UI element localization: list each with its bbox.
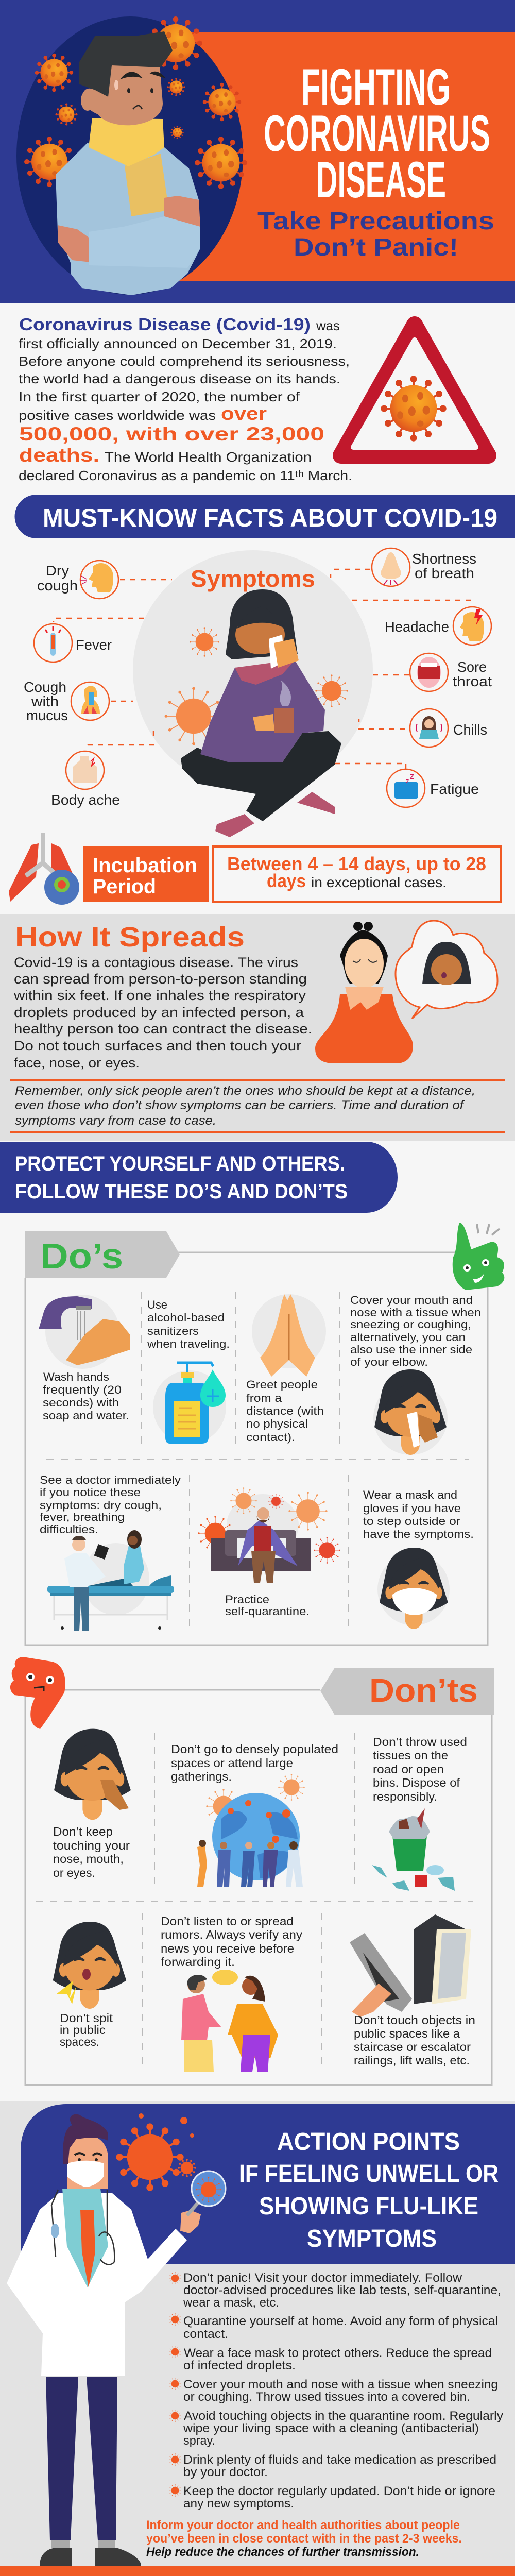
do: wash hands: seconds) with bbox=[43, 1396, 119, 1409]
hero orange band bbox=[154, 32, 515, 281]
section: hero, intro and symptoms bbox=[0, 0, 515, 905]
intro text: In the first quarter of 2020, the number of bbox=[19, 389, 300, 404]
intro text: 500,000, with over 23,000 bbox=[19, 423, 324, 445]
do: see a doctor: symptoms: dry cough, bbox=[40, 1499, 162, 1512]
panel: action points bbox=[0, 2101, 515, 2566]
hero sick man bbox=[56, 31, 200, 295]
symptom: shortness of breath: Shortness bbox=[412, 551, 476, 567]
how it spreads body: can spread from person-to-person standing bbox=[14, 971, 307, 987]
do: self-quarantine bbox=[198, 1487, 340, 1618]
symptom: cough with mucus bbox=[24, 679, 109, 723]
action list text: wipe your living space with a cleaning (antibacterial) bbox=[183, 2421, 479, 2435]
don't: spit: Don’t spit bbox=[60, 2011, 113, 2025]
hero dark oval bbox=[16, 16, 243, 295]
don't: spread rumors: Don’t listen to or spread bbox=[161, 1914, 294, 1928]
do: cover your mouth bbox=[350, 1294, 481, 1455]
symptom: dry cough bbox=[37, 561, 118, 599]
symptom: cough with mucus: with bbox=[31, 693, 59, 709]
hero panel bbox=[0, 0, 515, 303]
how it spreads body: Do not touch surfaces and then touch your bbox=[14, 1038, 301, 1054]
do: see a doctor: fever, breathing bbox=[40, 1511, 125, 1523]
action list text: Wear a face mask to protect others. Reduce the spread bbox=[184, 2346, 492, 2360]
symptom: fever: Fever bbox=[76, 637, 112, 653]
don't: touch face: touching your bbox=[53, 1839, 130, 1852]
panel: don'ts bbox=[10, 1657, 494, 2085]
don'ts tag: Don’ts bbox=[369, 1672, 478, 1709]
don't: spit bbox=[53, 1922, 126, 2048]
do: wear a mask: gloves if you have bbox=[363, 1502, 461, 1515]
action list text: doctor-advised procedures like lab tests, self-quarantine, bbox=[183, 2283, 501, 2297]
don't: touch objects: staircase or escalator bbox=[354, 2040, 471, 2054]
do: self-quarantine: Practice bbox=[225, 1593, 269, 1606]
don'ts frame bbox=[25, 1690, 492, 2085]
do: greet from a distance bbox=[246, 1294, 326, 1444]
don't: throw tissues: road or open bbox=[373, 1762, 444, 1776]
section: do's bbox=[25, 1223, 505, 1646]
section: how it spreads bbox=[0, 914, 515, 1213]
intro text: Coronavirus Disease (Covid-19) bbox=[19, 315, 311, 334]
symptom: chills bbox=[410, 709, 487, 747]
action points blue header: SYMPTOMS bbox=[307, 2225, 437, 2252]
symptom: fever bbox=[34, 624, 112, 662]
action points blue header: ACTION POINTS bbox=[277, 2128, 460, 2156]
don't: touch face bbox=[53, 1729, 131, 1879]
action points blue header bbox=[21, 2104, 515, 2264]
symptom: sore throat: throat bbox=[453, 673, 492, 689]
action list text: Cover your mouth and nose with a tissue when sneezing bbox=[183, 2378, 498, 2392]
action list text: Don’t panic! Visit your doctor immediately. Follow bbox=[183, 2271, 462, 2285]
how it spreads body: within six feet. If one inhales the respiratory bbox=[13, 988, 306, 1003]
do: wash hands: Wash hands bbox=[43, 1370, 109, 1383]
symptom: headache: Headache bbox=[385, 619, 449, 635]
hero subtitle bbox=[258, 208, 494, 261]
thumbs down icon bbox=[10, 1657, 65, 1729]
symptom: dry cough: cough bbox=[37, 578, 78, 594]
do: greet from a distance: from a bbox=[246, 1392, 282, 1404]
symptom: sore throat: Sore bbox=[457, 659, 487, 675]
thumbs up icon bbox=[453, 1223, 504, 1290]
do: see a doctor: See a doctor immediately bbox=[40, 1473, 181, 1486]
speech cloud with coughing girl bbox=[396, 921, 497, 1019]
don't: throw tissues: Don’t throw used bbox=[373, 1735, 467, 1749]
action list text: or coughing. Throw used tissues into a covered bin. bbox=[183, 2390, 470, 2404]
don't: spread rumors: news you receive before bbox=[161, 1942, 294, 1955]
do: wear a mask bbox=[363, 1488, 474, 1629]
do: wash hands: frequently (20 bbox=[43, 1383, 122, 1396]
do: cover your mouth: nose with a tissue when bbox=[350, 1306, 481, 1319]
do: cover your mouth: of your elbow. bbox=[350, 1355, 428, 1368]
panel: do's bbox=[25, 1223, 504, 1645]
don't: spit: in public bbox=[60, 2023, 106, 2037]
don'ts dashed dividers bbox=[36, 1733, 473, 2069]
worried woman illustration bbox=[315, 922, 413, 1063]
don't: crowded spaces: spaces or attend large bbox=[171, 1756, 293, 1770]
don't: crowded spaces: gatherings. bbox=[171, 1770, 232, 1783]
don't: crowded spaces: Don’t go to densely populated bbox=[171, 1742, 338, 1756]
action list text: spray. bbox=[183, 2434, 215, 2448]
don't: throw tissues: tissues on the bbox=[373, 1749, 448, 1762]
do: wear a mask: to step outside or bbox=[363, 1515, 460, 1528]
do: see a doctor: difficulties. bbox=[40, 1523, 98, 1536]
symptom: shortness of breath: of breath bbox=[415, 565, 474, 581]
intro text: over bbox=[221, 403, 267, 424]
italic note: Remember, only sick people aren’t the ones who should be kept at a distance, bbox=[15, 1084, 475, 1098]
action list text: wear a mask, etc. bbox=[183, 2296, 279, 2310]
intro text: The World Health Organization bbox=[105, 449, 312, 465]
do: self-quarantine: self-quarantine. bbox=[225, 1605, 310, 1618]
italic note bbox=[15, 1084, 475, 1128]
hero subtitle: Don’t Panic! bbox=[294, 234, 458, 261]
symptom: body ache: Body ache bbox=[51, 792, 120, 808]
action list text: of infected droplets. bbox=[183, 2359, 296, 2372]
panel: how it spreads bbox=[0, 914, 515, 1141]
intro text: declared Coronavirus as a pandemic on 11ᵗʰ March. bbox=[19, 468, 352, 483]
section: don'ts bbox=[10, 1657, 494, 2086]
do: cover your mouth: alternatively, you can bbox=[350, 1331, 466, 1344]
symptom: sore throat bbox=[410, 653, 492, 691]
do: wear a mask: Wear a mask and bbox=[363, 1488, 457, 1501]
don't: touch objects bbox=[350, 1914, 475, 2067]
inform callout: Help reduce the chances of further transmission. bbox=[146, 2545, 419, 2559]
intro text: positive cases worldwide was bbox=[19, 408, 216, 423]
italic note: even those who don’t show symptoms can be carriers. Time and duration of bbox=[15, 1098, 465, 1112]
incubation value box: Between 4 – 14 days, up to 28 bbox=[227, 853, 486, 874]
intro text: Before anyone could comprehend its seriousness, bbox=[19, 353, 350, 369]
inform callout: Inform your doctor and health authorities about people bbox=[146, 2518, 460, 2532]
don't: touch objects: Don’t touch objects in bbox=[354, 2013, 475, 2027]
don't: spread rumors: forwarding it. bbox=[161, 1955, 235, 1969]
symptom: cough with mucus: Cough bbox=[24, 679, 66, 695]
intro text bbox=[19, 315, 352, 483]
symptom: fatigue bbox=[387, 769, 479, 807]
do's dashed dividers bbox=[46, 1292, 469, 1628]
don't: touch objects: public spaces like a bbox=[354, 2027, 460, 2040]
don't: touch face: Don’t keep bbox=[53, 1825, 113, 1838]
incubation label: Incubation bbox=[93, 854, 197, 877]
incubation value box: in exceptional cases. bbox=[311, 874, 447, 890]
hero subtitle: Take Precautions bbox=[258, 208, 494, 235]
don't: throw tissues bbox=[372, 1735, 467, 1891]
do's tag bbox=[25, 1231, 180, 1278]
do: sanitizer: sanitizers bbox=[147, 1325, 199, 1337]
intro text: first officially announced on December 31, 2019. bbox=[19, 336, 337, 351]
do: see a doctor: if you notice these bbox=[40, 1486, 141, 1499]
do's tag: Do’s bbox=[40, 1236, 123, 1276]
do: wash hands: soap and water. bbox=[43, 1409, 129, 1422]
banner: must-know facts bbox=[14, 495, 515, 538]
don't: spread rumors: rumors. Always verify any bbox=[161, 1928, 303, 1941]
banner: myths and facts bbox=[0, 2566, 515, 2576]
action bullets bbox=[169, 2272, 181, 2497]
do: sanitizer: alcohol-based bbox=[147, 1311, 225, 1324]
do: greet from a distance: contact). bbox=[246, 1431, 295, 1444]
action list text: contact. bbox=[183, 2327, 228, 2341]
action list text bbox=[183, 2271, 503, 2511]
orange rule top bbox=[10, 1079, 505, 1081]
how it spreads body: droplets produced by an infected person, a bbox=[14, 1005, 304, 1020]
inform callout: you’ve been in close contact with in the past 2-3 weeks. bbox=[146, 2532, 462, 2546]
do: cover your mouth: Cover your mouth and bbox=[350, 1294, 473, 1307]
inform callout bbox=[146, 2518, 462, 2559]
don't: touch face: or eyes. bbox=[53, 1866, 95, 1879]
do: sanitizer: Use bbox=[147, 1298, 167, 1311]
symptom: dry cough: Dry bbox=[46, 563, 69, 579]
action points blue header: SHOWING FLU-LIKE bbox=[259, 2193, 478, 2220]
action list text: by your doctor. bbox=[183, 2465, 268, 2479]
symptoms heading: Symptoms bbox=[191, 565, 315, 592]
do: greet from a distance: no physical bbox=[246, 1417, 308, 1430]
banner: protect yourself: FOLLOW THESE DO’S AND DON’TS bbox=[15, 1180, 348, 1203]
symptom: body ache bbox=[51, 751, 120, 808]
how it spreads body bbox=[13, 955, 312, 1071]
do: greet from a distance: Greet people bbox=[246, 1378, 318, 1391]
do: sanitizer: when traveling. bbox=[147, 1337, 230, 1350]
do: cover your mouth: sneezing or coughing, bbox=[350, 1318, 471, 1331]
banner: protect yourself: PROTECT YOURSELF AND OTHERS. bbox=[15, 1153, 345, 1175]
how it spreads body: face, nose, or eyes. bbox=[14, 1055, 140, 1071]
symptom: chills: Chills bbox=[453, 722, 487, 738]
action list text: Keep the doctor regularly updated. Don’t hide or ignore bbox=[183, 2484, 495, 2498]
doctor illustration bbox=[7, 2113, 226, 2566]
symptom: fatigue: Z bbox=[406, 779, 409, 785]
banner: protect yourself bbox=[0, 1142, 398, 1213]
don't: spread rumors bbox=[161, 1914, 303, 2072]
intro text: was bbox=[316, 318, 340, 333]
panel: symptoms bbox=[24, 548, 492, 837]
don't: throw tissues: bins. Dispose of bbox=[373, 1776, 460, 1789]
incubation label: Period bbox=[93, 875, 156, 898]
do: see a doctor bbox=[40, 1473, 181, 1631]
italic note: symptoms vary from case to case. bbox=[15, 1114, 216, 1128]
don't: throw tissues: responsibly. bbox=[373, 1790, 437, 1803]
lungs icon bbox=[9, 833, 79, 905]
intro text: deaths. bbox=[19, 445, 99, 466]
intro text: the world had a dangerous disease on its hands. bbox=[19, 371, 340, 386]
section: action points bbox=[0, 2101, 515, 2576]
orange rule bottom bbox=[10, 1131, 505, 1133]
don't: crowded spaces bbox=[171, 1742, 338, 1887]
incubation label bbox=[83, 846, 209, 902]
action list text: any new symptoms. bbox=[183, 2497, 294, 2511]
symptoms backdrop circle bbox=[133, 550, 373, 790]
how it spreads heading: How It Spreads bbox=[15, 922, 245, 953]
how it spreads body: healthy person too can contract the disease. bbox=[14, 1021, 312, 1037]
do: greet from a distance: distance (with bbox=[246, 1404, 324, 1417]
don't: touch face: nose, mouth, bbox=[53, 1852, 124, 1866]
sick girl illustration bbox=[165, 589, 348, 837]
how it spreads body: Covid-19 is a contagious disease. The virus bbox=[14, 955, 298, 970]
do: sanitizer bbox=[147, 1298, 230, 1444]
do: cover your mouth: also use the inner side bbox=[350, 1343, 472, 1356]
action list text: Avoid touching objects in the quarantine room. Regularly bbox=[184, 2409, 503, 2423]
don'ts tag bbox=[320, 1668, 494, 1715]
symptom: shortness of breath bbox=[372, 548, 476, 586]
connector lines bbox=[54, 569, 472, 769]
symptom: fatigue: Fatigue bbox=[430, 781, 479, 797]
don't: spit: spaces. bbox=[60, 2035, 99, 2048]
hero title bbox=[264, 58, 490, 208]
incubation value box bbox=[213, 846, 501, 902]
do's frame bbox=[25, 1252, 488, 1645]
action list text: Quarantine yourself at home. Avoid any form of physical bbox=[183, 2314, 498, 2328]
don't: touch objects: railings, lift walls, etc. bbox=[354, 2054, 470, 2067]
hero viruses bbox=[24, 16, 247, 189]
symptom: headache bbox=[385, 607, 491, 645]
banner: must-know facts: MUST-KNOW FACTS ABOUT COVID-19 bbox=[43, 503, 497, 532]
incubation value box: days bbox=[267, 870, 306, 891]
do: wear a mask: have the symptoms. bbox=[363, 1528, 474, 1540]
action list text: Drink plenty of fluids and take medication as prescribed bbox=[183, 2453, 496, 2467]
symptom: cough with mucus: mucus bbox=[26, 707, 68, 723]
do: wash hands bbox=[39, 1295, 130, 1422]
symptom: fatigue: Z bbox=[410, 773, 414, 781]
warning triangle icon bbox=[341, 325, 488, 455]
